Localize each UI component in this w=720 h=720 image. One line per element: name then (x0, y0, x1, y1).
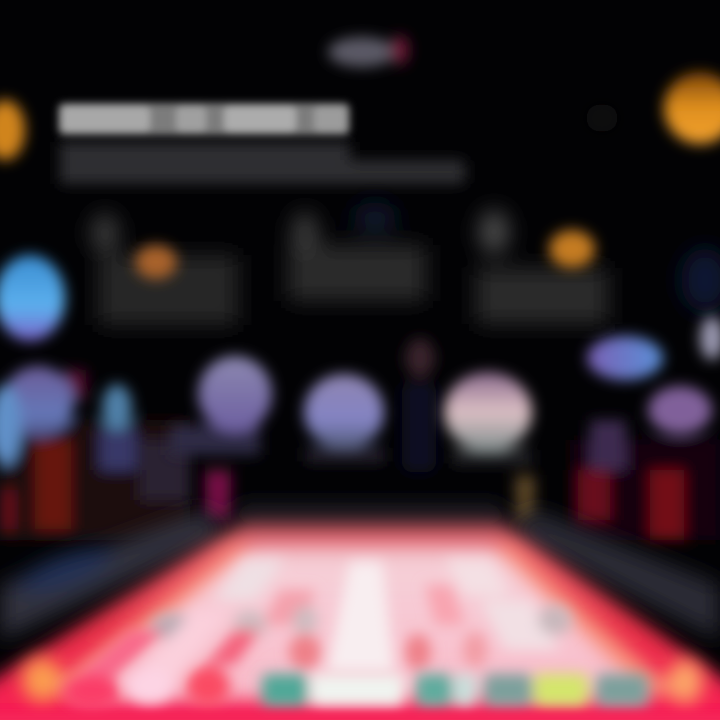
panel: feature three (476, 210, 608, 324)
heading (58, 103, 350, 135)
table surface with glow (22, 545, 703, 704)
icon: feature three orange (549, 230, 595, 268)
right blue haze (681, 248, 720, 312)
subheading (60, 142, 465, 184)
right machines (570, 316, 720, 540)
centre figure (402, 338, 436, 472)
icon: orange glow left (0, 100, 25, 160)
floor side rails (0, 505, 720, 640)
table edge (0, 522, 720, 720)
centre left machine (170, 356, 272, 520)
panel: feature two (288, 202, 426, 301)
table bottom edge (0, 714, 720, 720)
centre right machine (444, 372, 535, 523)
bottom row (262, 674, 648, 706)
left machines (0, 366, 190, 540)
table squares (60, 560, 572, 710)
panel: feature one (91, 213, 238, 325)
icon: blue orb (0, 255, 65, 341)
faint dim spot (586, 104, 618, 132)
top logo (328, 35, 409, 67)
slot machines row (0, 316, 720, 540)
centre machine (304, 374, 385, 462)
roulette table (0, 522, 720, 720)
icon: orange glow right (664, 72, 720, 144)
icon: feature one orange (135, 245, 177, 279)
